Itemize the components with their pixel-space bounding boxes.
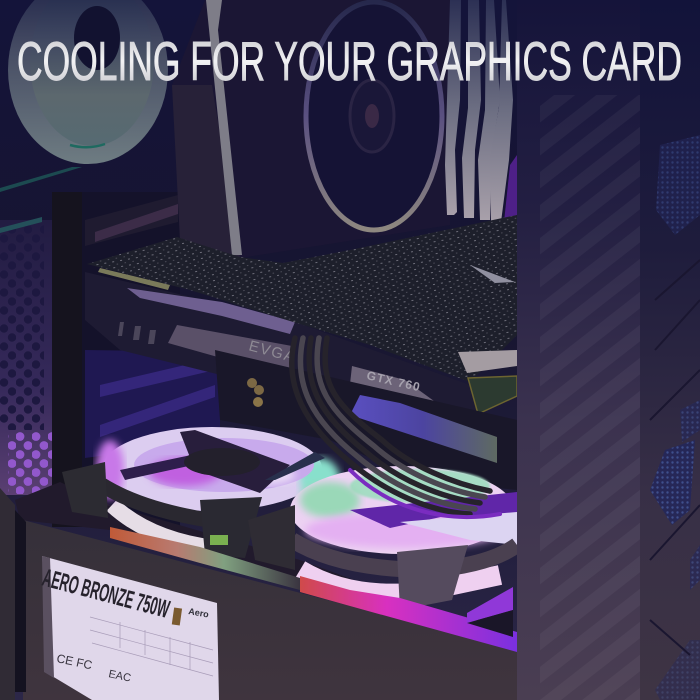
vent slots	[118, 322, 124, 336]
GTX 760 plate	[350, 366, 434, 401]
compliance marks: CE FC	[55, 651, 94, 672]
green lit edge	[0, 167, 82, 192]
motherboard area	[215, 350, 517, 490]
shroud body	[85, 272, 480, 412]
fan blades	[120, 450, 225, 480]
shroud light panel with EVGA	[168, 325, 292, 378]
RAM sticks	[445, 0, 513, 222]
reflective top edge of PSU	[110, 527, 300, 590]
graphics card: EVGA	[247, 337, 297, 366]
cooler: CPU cooler tower with white strip	[172, 0, 450, 258]
lower white rim	[112, 505, 215, 548]
graphics card	[85, 215, 517, 414]
panel: front case hex mesh	[640, 0, 700, 700]
bronze badge	[172, 608, 182, 625]
power supply unit	[23, 520, 517, 700]
graphics card: GTX 760	[365, 368, 422, 394]
panel: rear PCI bracket slots	[52, 192, 220, 527]
label heading: AERO BRONZE 750W	[39, 564, 173, 624]
spec table	[90, 617, 213, 676]
fan: CPU cooler ring	[306, 2, 442, 230]
power supply unit: EAC	[107, 668, 132, 685]
panel: left rear case wall with hex mesh	[0, 217, 52, 495]
fan: top left white fan	[8, 0, 168, 164]
heatsink block right	[458, 350, 517, 373]
upper purple strip	[127, 288, 295, 334]
case side post bottom left	[0, 488, 15, 700]
brand mark: Aero	[188, 606, 210, 620]
fan frame	[102, 485, 245, 525]
panel: carbon fibre case pillar	[517, 0, 640, 700]
bright component wedge	[470, 265, 515, 283]
lower white rim	[300, 570, 500, 594]
PCB	[87, 215, 517, 382]
fan: lower right RGB fan	[248, 466, 517, 610]
panel: top face of power supply	[15, 482, 517, 655]
fan: lower left RGB fan	[62, 427, 340, 558]
PSU label	[42, 556, 219, 700]
power cables	[292, 338, 500, 517]
